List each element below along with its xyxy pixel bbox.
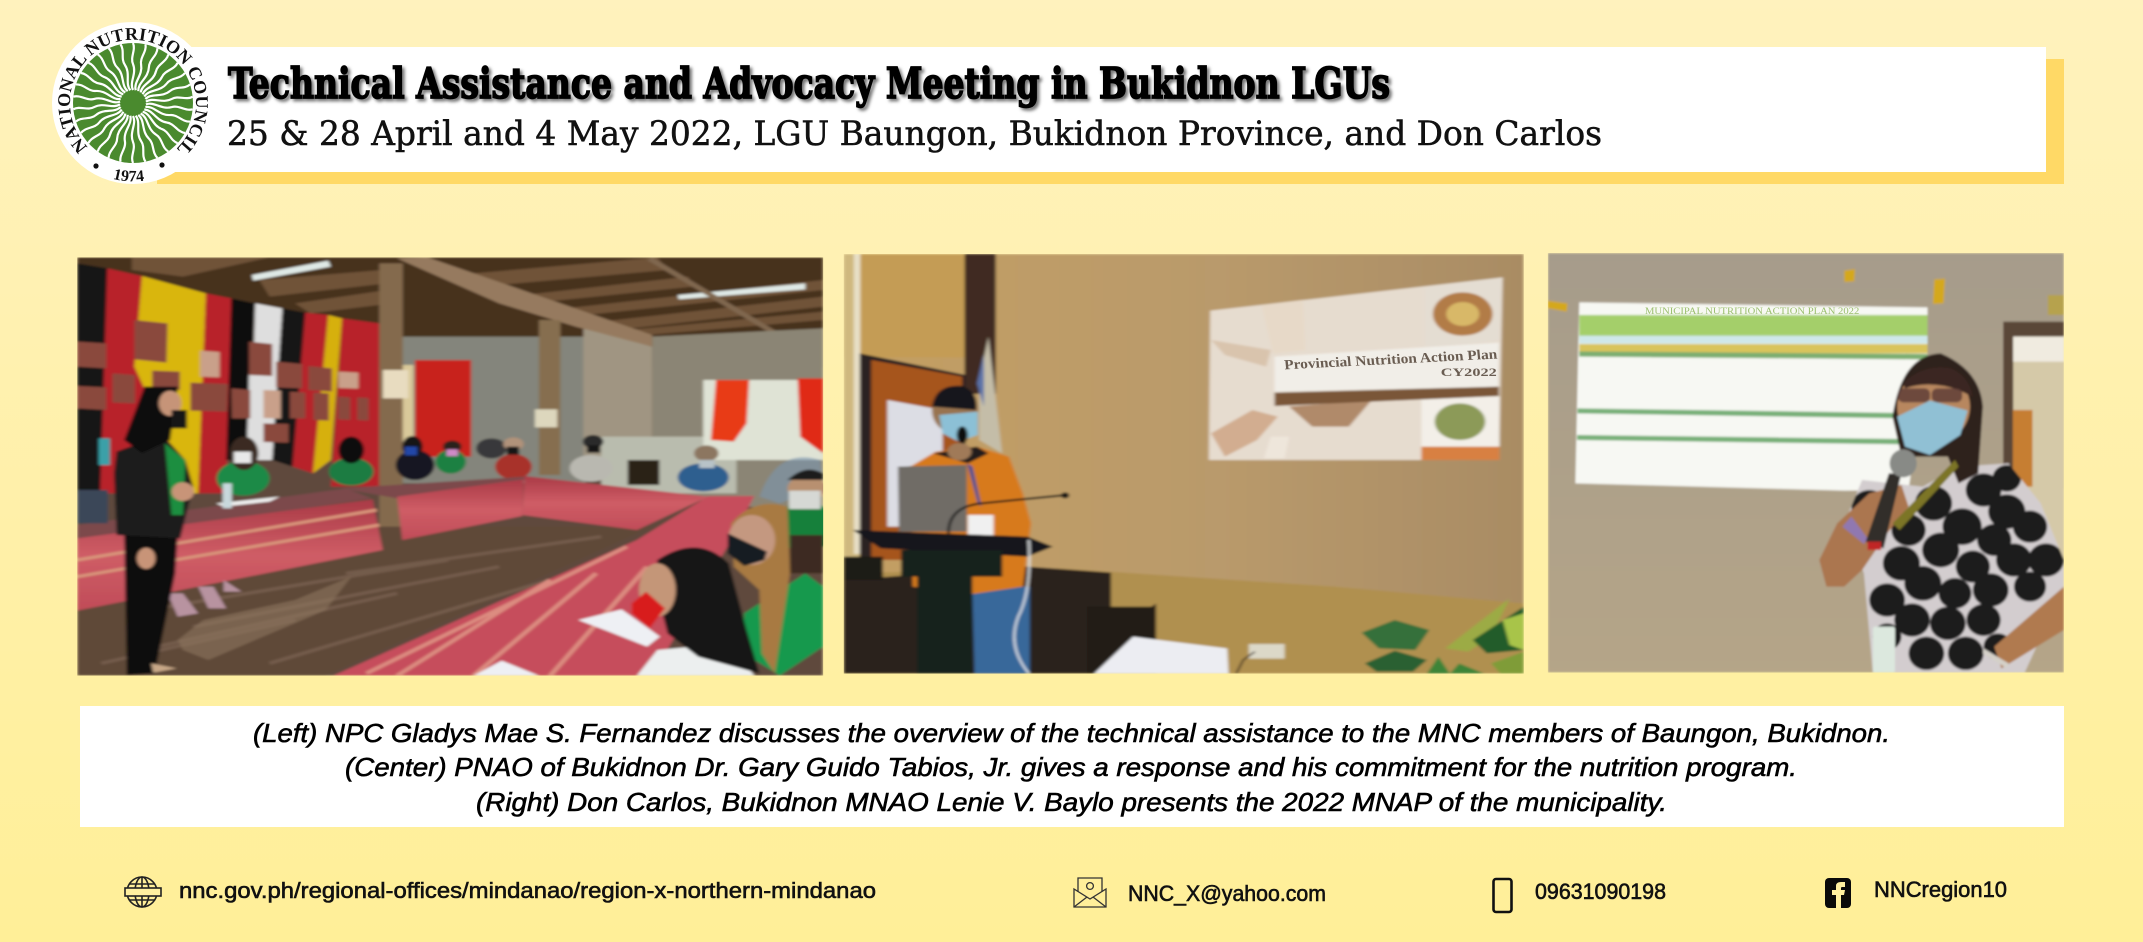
tape marks — [1548, 269, 1945, 312]
pillar and door — [965, 254, 996, 394]
far walls — [402, 337, 586, 483]
woman with red mask — [637, 643, 754, 676]
contact: website: nnc.gov.ph/regional-offices/mindanao/region-x-northern-mindanao — [179, 878, 876, 903]
woman: head — [1892, 353, 1983, 483]
contact: phone — [1494, 879, 1666, 912]
seated people — [217, 461, 270, 496]
arm and microphone — [1819, 485, 1909, 587]
slide heading: Provincial Nutrition Action Plan — [1283, 346, 1498, 373]
floor — [78, 526, 404, 676]
contact: facebook: NNCregion10 — [1874, 877, 2007, 902]
desk — [844, 567, 1156, 674]
slide heading — [1284, 350, 1498, 376]
caption line: center: (Center) PNAO of Bukidnon Dr. Gary Guido Tabios, Jr. gives a response and his commitment for the nutrition program. — [345, 752, 1797, 782]
logo: National Nutrition Council: 1974 — [114, 170, 144, 182]
plant — [1362, 620, 1429, 650]
podium — [853, 530, 1053, 557]
door on right — [2003, 322, 2064, 488]
contact: email: NNC_X@yahoo.com — [1128, 881, 1326, 906]
contact: phone: 09631090198 — [1535, 879, 1666, 904]
projected slide — [1209, 277, 1503, 460]
slide heading: CY2022 — [1441, 366, 1497, 379]
framed pictures — [77, 320, 369, 443]
icon: facebook — [1825, 878, 1851, 908]
tables — [77, 488, 372, 542]
right side man and women — [759, 457, 823, 503]
projector — [1094, 637, 1229, 674]
woman: dress — [1844, 463, 2064, 673]
badge — [1873, 627, 1895, 673]
contact: email — [1074, 878, 1326, 907]
ceiling — [77, 257, 823, 367]
projected table — [1575, 302, 1927, 491]
red curtain — [415, 360, 471, 457]
laptop — [898, 465, 967, 532]
window with curtains — [703, 380, 823, 460]
photo: right, speaker with microphone — [1548, 253, 2064, 673]
caption panel — [80, 706, 2064, 827]
icon: envelope — [1074, 878, 1106, 907]
projected table heading: MUNICIPAL NUTRITION ACTION PLAN 2022 — [1645, 306, 1859, 317]
legs under table — [168, 580, 242, 617]
logo: National Nutrition Council: NATIONAL NUTRITION COUNCIL — [58, 28, 208, 154]
caption line: right: (Right) Don Carlos, Bukidnon MNAO Lenie V. Baylo presents the 2022 MNAP of the municipality. — [476, 787, 1667, 817]
subtitle: 25 & 28 April and 4 May 2022, LGU Baungon, Bukidnon Province, and Don Carlos — [227, 114, 1602, 154]
caption line: left: (Left) NPC Gladys Mae S. Fernandez discusses the overview of the technical assistance to the MNC members of Baungon, Bukidnon. — [253, 718, 1890, 748]
contact: facebook — [1825, 877, 2007, 908]
forearm right — [1994, 587, 2064, 668]
icon: mobile phone — [1494, 879, 1512, 912]
header banner — [157, 47, 2064, 184]
striped wall — [77, 263, 107, 493]
outlet — [1249, 644, 1285, 659]
pillars and beam — [397, 257, 652, 347]
title: Technical Assistance and Advocacy Meeting in Bukidnon LGUs — [228, 59, 1390, 108]
photo: center, presenter at podium — [844, 254, 1524, 674]
woman with blonde hair — [744, 573, 823, 676]
presenter — [972, 587, 1030, 674]
photo: left, meeting hall — [77, 257, 836, 676]
poster — [887, 400, 942, 527]
icon: globe — [125, 877, 161, 907]
standing woman — [124, 533, 178, 675]
